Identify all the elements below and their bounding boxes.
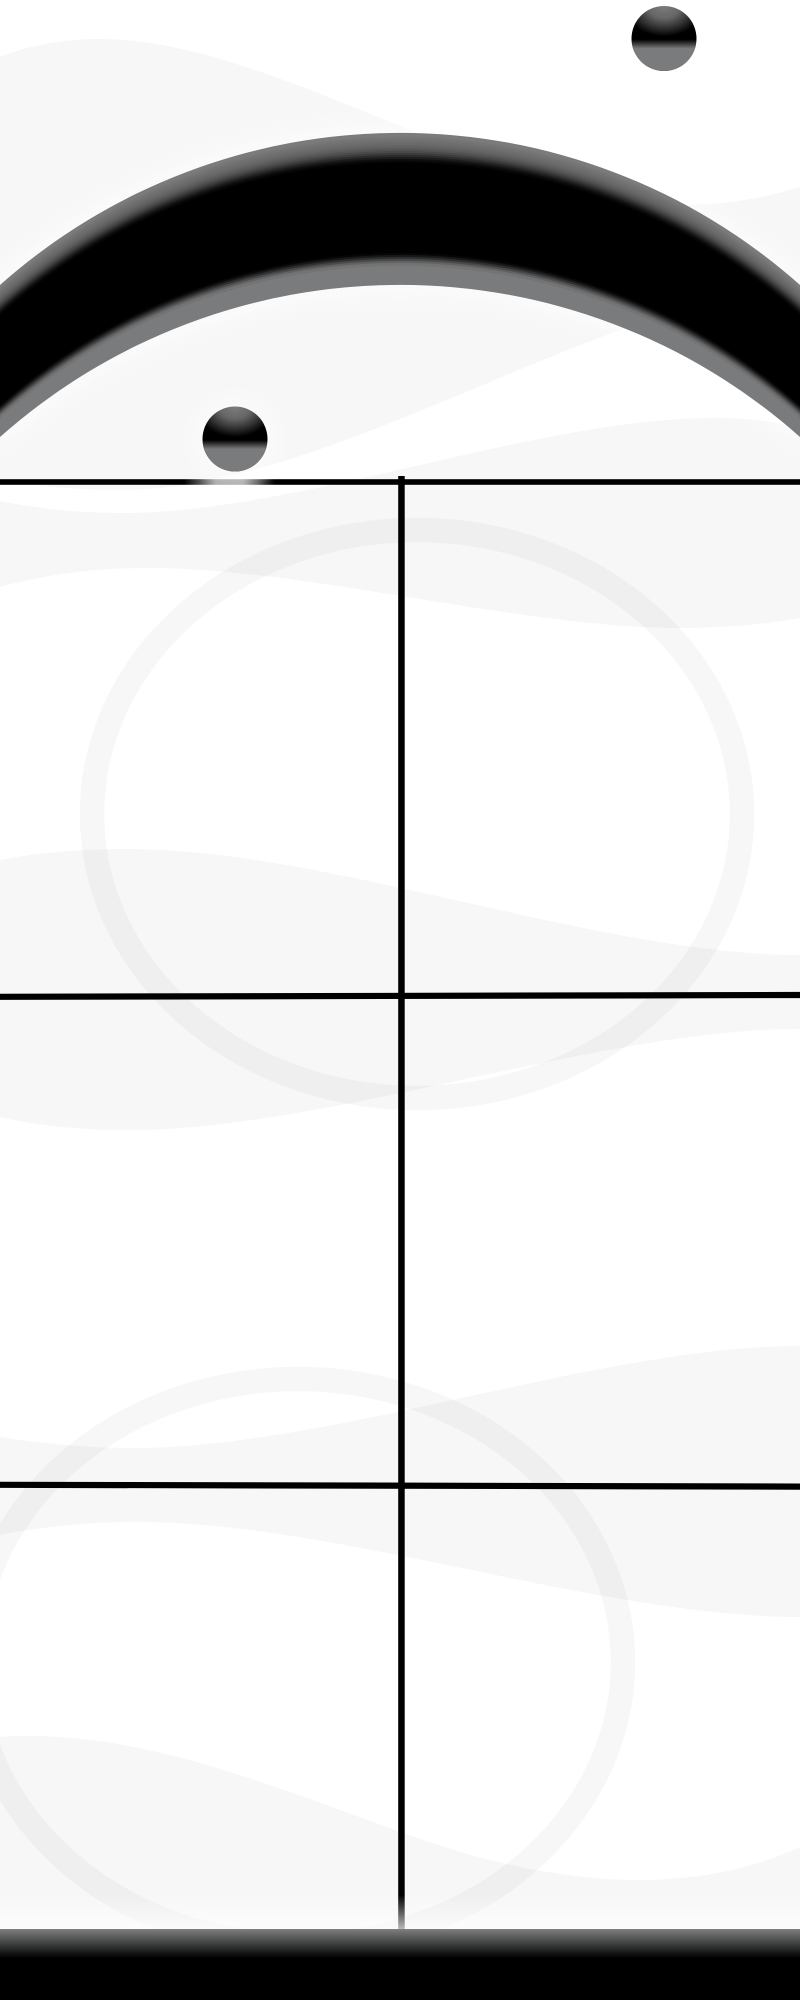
arc base band xyxy=(0,133,800,437)
arc upper gradient xyxy=(0,137,800,316)
wave band: bottom xyxy=(0,1736,800,1940)
line fade under ball xyxy=(184,478,275,486)
main arc xyxy=(0,133,800,437)
ring: lower ellipse outline xyxy=(0,1379,623,1945)
arc black core xyxy=(0,163,800,407)
bottom bar xyxy=(0,1929,800,2000)
grid lines xyxy=(0,476,800,1932)
arc glow xyxy=(0,133,800,437)
horizontal line: lower xyxy=(0,1485,800,1487)
ball halo: lower xyxy=(180,384,290,494)
ring: upper ellipse outline xyxy=(92,530,742,1098)
arc lower gradient xyxy=(0,253,800,418)
horizontal line: middle xyxy=(0,995,800,997)
ball: lower left xyxy=(202,406,268,472)
wave band: lower middle xyxy=(0,1346,800,1617)
wave band: upper middle xyxy=(0,418,800,628)
vertical line: centre xyxy=(398,476,405,1932)
wave band: top xyxy=(0,39,800,490)
horizontal line: top xyxy=(0,479,800,485)
ball: top right xyxy=(632,6,696,71)
wave band: middle xyxy=(0,849,800,1130)
bottom bar glow xyxy=(0,1895,800,1929)
